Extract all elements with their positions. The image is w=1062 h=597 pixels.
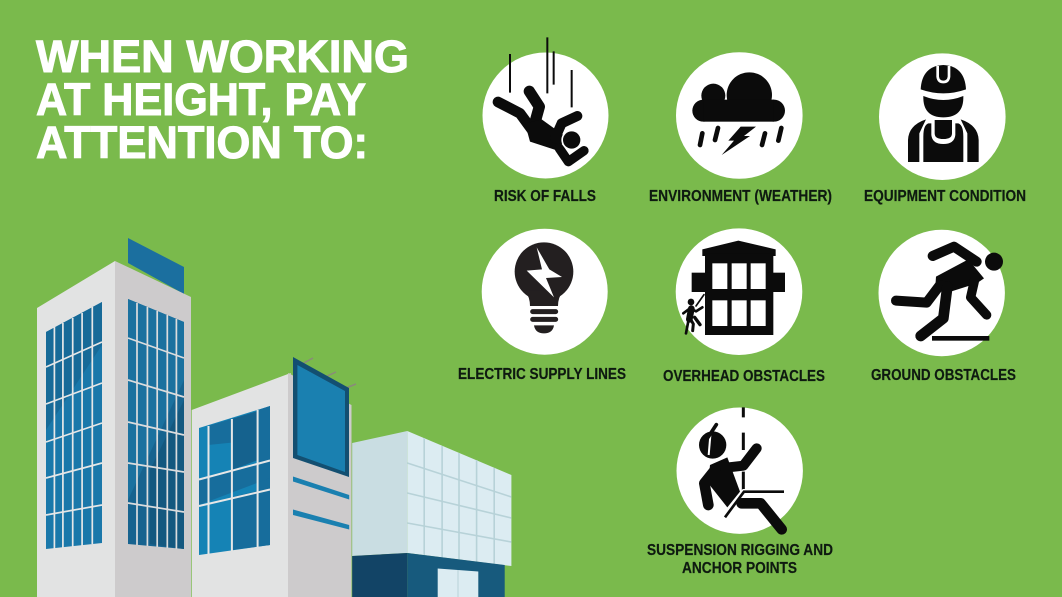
icon: falling person: [482, 37, 608, 179]
icon: worker with helmet: [879, 53, 1006, 180]
low glass building: [352, 431, 511, 597]
panel: ground obstacles: [871, 230, 1016, 384]
icon: light bulb with bolt: [482, 229, 608, 355]
icon: tripping person: [878, 230, 1005, 356]
label: EQUIPMENT CONDITION: [864, 188, 1026, 205]
tall tower: [37, 238, 191, 597]
panel: suspension rigging and anchor points: [647, 407, 833, 577]
label: ENVIRONMENT (WEATHER): [649, 188, 832, 205]
title: ATTENTION TO:: [36, 117, 368, 168]
label: [647, 542, 833, 577]
panel: risk of falls: [482, 37, 608, 205]
panel: equipment condition: [864, 53, 1026, 205]
label: SUSPENSION RIGGING AND: [647, 542, 833, 559]
panel: overhead obstacles: [663, 228, 825, 385]
label: ANCHOR POINTS: [682, 560, 797, 577]
icon: building with worker: [676, 228, 802, 355]
icon: storm cloud: [676, 52, 803, 179]
label: OVERHEAD OBSTACLES: [663, 368, 825, 385]
illustration: office buildings: [37, 238, 511, 597]
label: ELECTRIC SUPPLY LINES: [458, 366, 626, 383]
title: WHEN WORKING: [36, 31, 409, 82]
panel: environment (weather): [649, 52, 832, 205]
label: RISK OF FALLS: [494, 188, 596, 205]
panel: electric supply lines: [458, 229, 626, 383]
label: GROUND OBSTACLES: [871, 367, 1016, 384]
title: AT HEIGHT, PAY: [36, 74, 366, 125]
middle building: [192, 357, 356, 597]
title: [36, 31, 409, 168]
icon: suspended worker: [676, 407, 803, 534]
